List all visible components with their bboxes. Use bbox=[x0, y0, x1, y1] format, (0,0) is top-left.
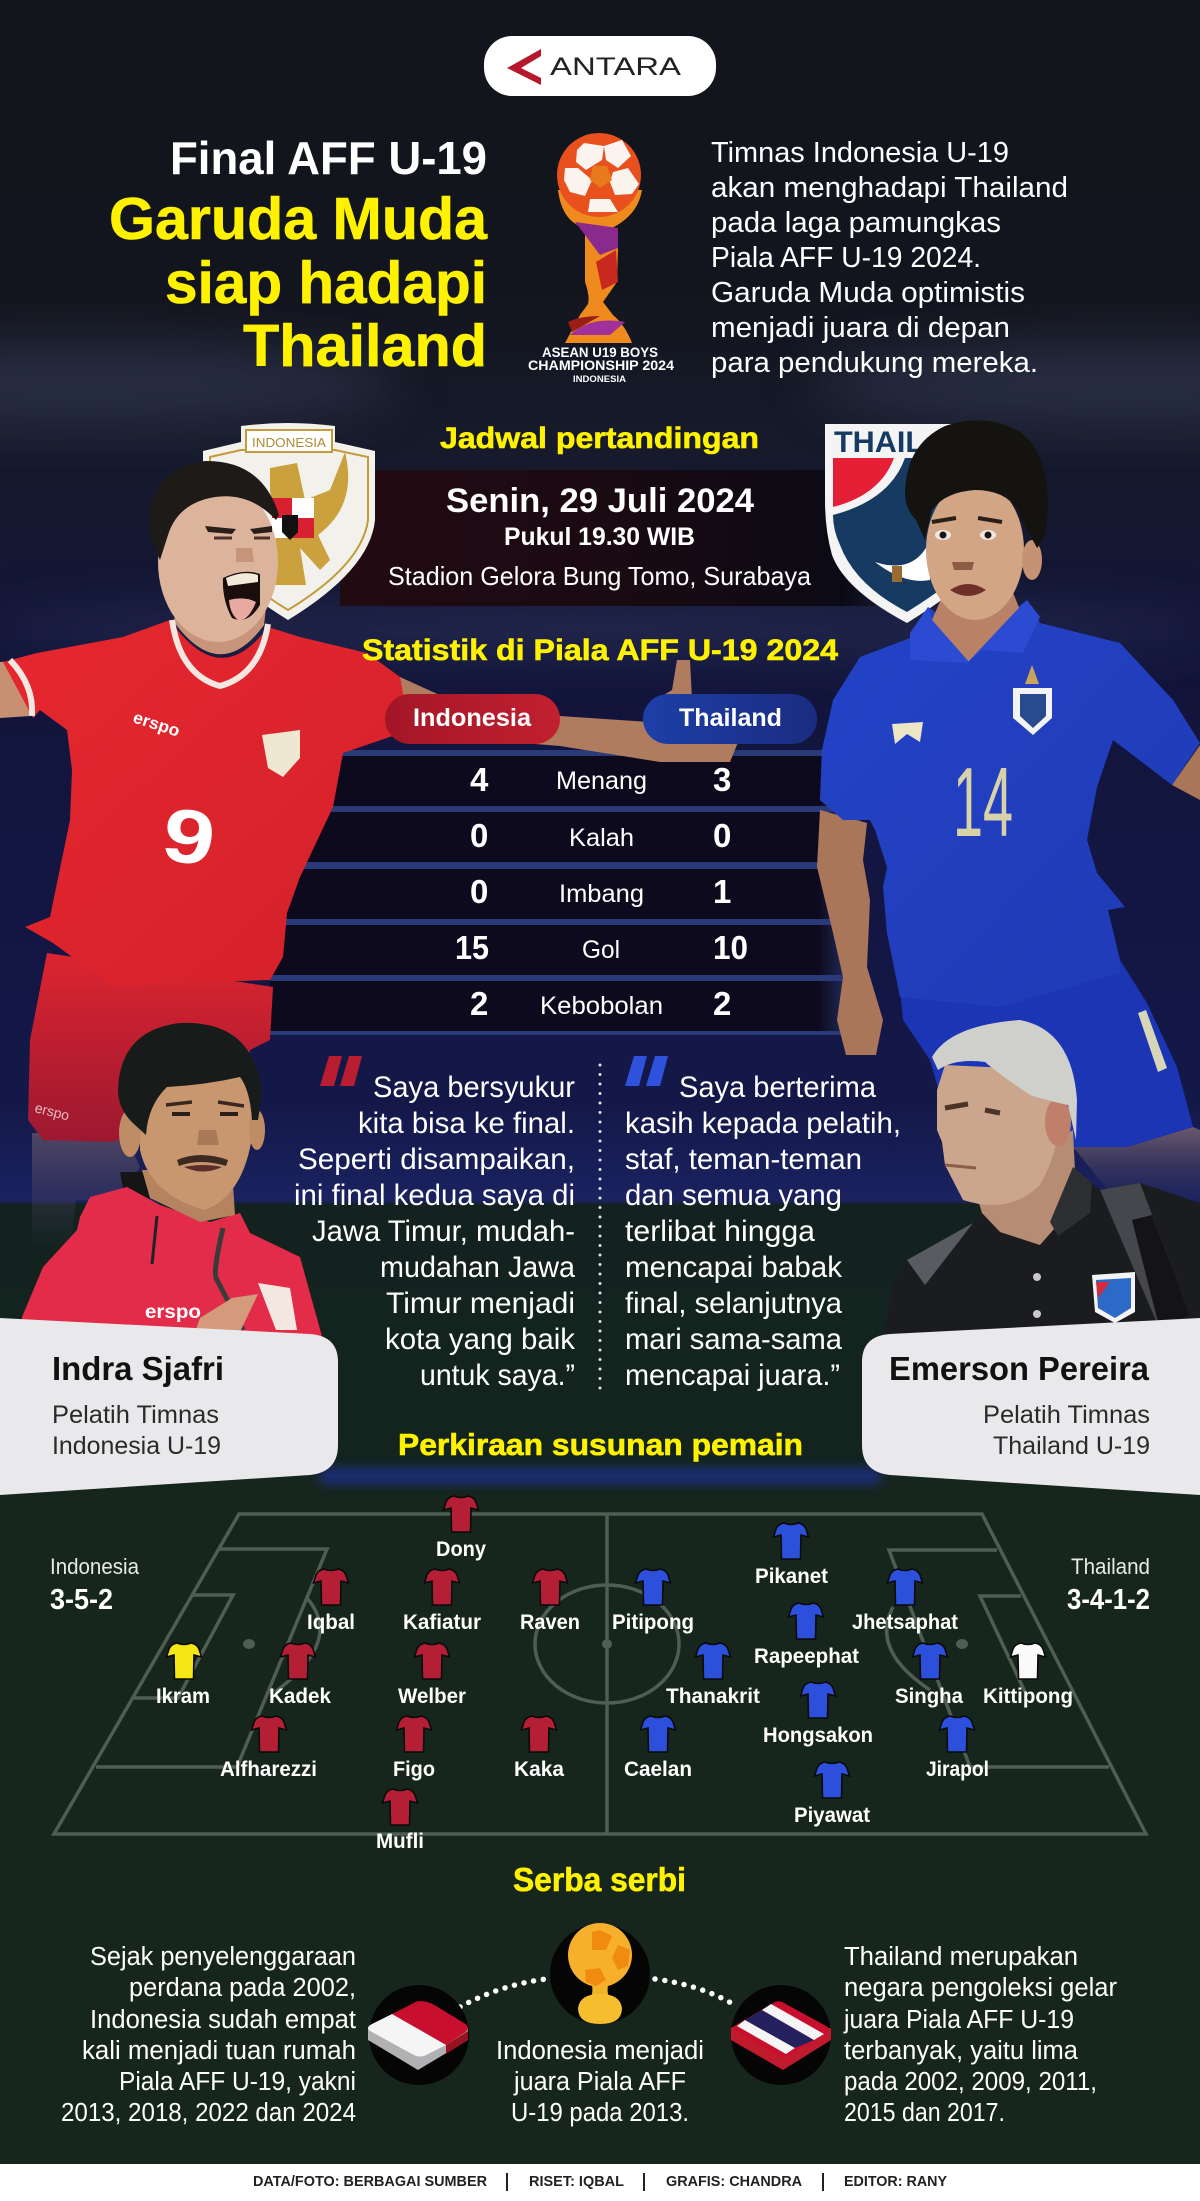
intro text: Timnas Indonesia U-19 bbox=[711, 137, 1009, 169]
title: Final AFF U-19 bbox=[170, 132, 487, 184]
collar bbox=[910, 600, 1040, 663]
team pills bbox=[385, 694, 560, 744]
player: Indonesia number 9: erspo bbox=[33, 1099, 71, 1123]
name card: Emerson Pereira: Emerson Pereira bbox=[889, 1350, 1150, 1387]
inner collar bbox=[120, 1172, 150, 1200]
player: Kittipong: Kittipong bbox=[983, 1685, 1073, 1708]
logo: ANTARA: ANTARA bbox=[550, 53, 681, 81]
row: Menang: 3 bbox=[713, 761, 731, 798]
schedule details: Stadion Gelora Bung Tomo, Surabaya bbox=[388, 561, 812, 591]
shorts bbox=[900, 960, 1193, 1147]
crest bbox=[262, 730, 300, 777]
row: Kebobolan: Kebobolan bbox=[540, 992, 663, 1020]
bag strap bbox=[1100, 1183, 1190, 1330]
name card: Indra Sjafri: Indonesia U-19 bbox=[52, 1432, 221, 1460]
player: Figo: Figo bbox=[393, 1758, 435, 1781]
quote: Emerson Pereira: staf, teman-teman bbox=[625, 1143, 862, 1176]
legs bbox=[1073, 1127, 1200, 1205]
footer credits: GRAFIS: CHANDRA bbox=[666, 2173, 802, 2190]
icon: garuda bbox=[270, 452, 348, 585]
neck bbox=[142, 1170, 235, 1222]
mouth bbox=[223, 572, 260, 620]
trophy logo bbox=[528, 133, 675, 385]
neck bbox=[975, 1130, 1090, 1245]
player: Dony bbox=[436, 1496, 486, 1561]
footer credits: RISET: IQBAL bbox=[529, 2173, 624, 2190]
player: Pitipong: Pitipong bbox=[612, 1611, 694, 1634]
head bbox=[926, 480, 1024, 620]
player: Jhetsaphat bbox=[852, 1569, 958, 1634]
player: Pitipong bbox=[612, 1569, 694, 1634]
quote: Emerson Pereira: mari sama-sama bbox=[625, 1323, 843, 1356]
trivia text: 2013 champion bbox=[496, 2037, 704, 2127]
quote: Indra Sjafri: Timur menjadi bbox=[386, 1287, 575, 1320]
row: Gol: 10 bbox=[713, 929, 748, 966]
player: Caelan bbox=[624, 1716, 692, 1781]
coach photo: Indra Sjafri: erspo bbox=[145, 1302, 201, 1323]
quote: Emerson Pereira: kasih kepada pelatih, bbox=[625, 1107, 901, 1140]
player: Figo bbox=[393, 1716, 435, 1781]
team label: Indonesia 3-5-2: 3-5-2 bbox=[50, 1584, 113, 1616]
trivia text: Thailand titles: juara Piala AFF U-19 bbox=[843, 2006, 1074, 2034]
player: Indonesia number 9: erspo bbox=[131, 708, 182, 741]
statistics heading: Statistik di Piala AFF U-19 2024 bbox=[362, 634, 838, 667]
name card: Indra Sjafri bbox=[0, 1318, 338, 1495]
trophy logo: INDONESIA bbox=[573, 374, 626, 385]
statistics table: Thailand bbox=[679, 704, 782, 732]
row: Kalah: Kalah bbox=[569, 824, 634, 852]
player: Dony: Dony bbox=[436, 1538, 486, 1561]
row: Kebobolan: 2 bbox=[713, 985, 731, 1022]
trivia text: Thailand titles: pada 2002, 2009, 2011, bbox=[844, 2068, 1097, 2096]
row: Kebobolan bbox=[470, 985, 731, 1022]
player: Raven bbox=[520, 1569, 580, 1634]
hair bbox=[905, 420, 1048, 548]
title: Garuda Muda bbox=[109, 186, 488, 252]
crest bbox=[1092, 1272, 1135, 1323]
quote: Emerson Pereira: dan semua yang bbox=[625, 1179, 842, 1212]
schedule details: Senin, 29 Juli 2024 bbox=[446, 482, 754, 520]
intro text: pada laga pamungkas bbox=[711, 207, 1001, 239]
name card: Indra Sjafri: Indra Sjafri bbox=[52, 1350, 224, 1387]
intro text: Piala AFF U-19 2024. bbox=[711, 242, 981, 274]
legs bbox=[32, 1100, 140, 1250]
trivia text: Indonesia hosts: kali menjadi tuan rumah bbox=[82, 2037, 356, 2065]
trivia text: Indonesia hosts: Piala AFF U-19, yakni bbox=[119, 2068, 356, 2096]
intro text: Garuda Muda optimistis bbox=[711, 277, 1025, 309]
trivia text: Indonesia hosts: Indonesia sudah empat bbox=[90, 2006, 356, 2034]
icon: blue quote mark bbox=[625, 1056, 668, 1086]
hair bbox=[150, 461, 279, 560]
arms bbox=[817, 810, 883, 1055]
trophy logo: CHAMPIONSHIP 2024 bbox=[528, 358, 675, 373]
crest bbox=[1013, 688, 1052, 735]
team label: Thailand 3-4-1-2: 3-4-1-2 bbox=[1067, 1584, 1150, 1616]
player: Rapeephat bbox=[754, 1603, 859, 1668]
row: Imbang: 1 bbox=[713, 873, 731, 910]
neck bbox=[174, 590, 268, 654]
shorts bbox=[28, 953, 273, 1142]
schedule panel background bbox=[340, 470, 900, 606]
quote: Indra Sjafri: Seperti disampaikan, bbox=[298, 1143, 575, 1176]
quote: Indra Sjafri: untuk saya.” bbox=[420, 1359, 575, 1392]
player: Iqbal: Iqbal bbox=[307, 1611, 355, 1634]
player: Mufli: Mufli bbox=[376, 1830, 424, 1853]
coach photo: Indra Sjafri bbox=[22, 1023, 323, 1340]
team label: Thailand 3-4-1-2 bbox=[1067, 1554, 1150, 1616]
trivia text: Indonesia hosts: 2013, 2018, 2022 dan 2024 bbox=[61, 2099, 356, 2127]
football pitch bbox=[54, 1514, 1146, 1834]
team label: Indonesia 3-5-2 bbox=[50, 1554, 140, 1616]
jersey bbox=[3, 620, 410, 987]
row: Menang: Menang bbox=[556, 767, 647, 795]
icon: Thailand flag bbox=[731, 1985, 831, 2085]
player: Hongsakon: Hongsakon bbox=[763, 1724, 873, 1747]
trophy logo: ASEAN U19 BOYS bbox=[542, 345, 658, 360]
Thailand crest bbox=[825, 424, 990, 623]
name card: Emerson Pereira: Thailand U-19 bbox=[993, 1432, 1150, 1460]
row: Menang bbox=[470, 761, 731, 798]
quote: Emerson Pereira: final, selanjutnya bbox=[625, 1287, 843, 1320]
player: Kadek: Kadek bbox=[269, 1685, 331, 1708]
footer credits: DATA/FOTO: BERBAGAI SUMBER bbox=[253, 2173, 487, 2190]
row: Menang: 4 bbox=[470, 761, 489, 798]
logo: ANTARA bbox=[484, 36, 716, 96]
trivia text: Indonesia hosts bbox=[61, 1943, 356, 2127]
player: Indonesia number 9 bbox=[0, 461, 745, 1250]
statistics table: Indonesia bbox=[413, 704, 532, 732]
player: Iqbal bbox=[307, 1569, 355, 1634]
zipper and drawstring bbox=[215, 1228, 243, 1330]
player: Jhetsaphat: Jhetsaphat bbox=[852, 1611, 958, 1634]
jersey bbox=[820, 600, 1200, 1007]
icon: Indonesia flag bbox=[368, 1985, 469, 2085]
intro text bbox=[711, 137, 1068, 379]
player: Piyawat bbox=[794, 1762, 870, 1827]
hand bbox=[195, 1294, 258, 1332]
footer credits: EDITOR: RANY bbox=[844, 2173, 947, 2190]
name card: Emerson Pereira: Pelatih Timnas bbox=[983, 1401, 1150, 1429]
player: Thanakrit: Thanakrit bbox=[666, 1685, 760, 1708]
name card: Emerson Pereira bbox=[862, 1318, 1200, 1495]
row: Imbang: Imbang bbox=[559, 880, 644, 908]
schedule details bbox=[388, 482, 812, 591]
player: Welber: Welber bbox=[398, 1685, 466, 1708]
footer credits bbox=[0, 2164, 1200, 2201]
player: Singha bbox=[895, 1643, 963, 1708]
icon: championship trophy bbox=[550, 1923, 650, 2024]
player: Raven: Raven bbox=[520, 1611, 580, 1634]
trivia text: Indonesia hosts: Sejak penyelenggaraan bbox=[90, 1943, 356, 1971]
coach photo: Emerson Pereira bbox=[883, 1020, 1200, 1345]
quote: Emerson Pereira bbox=[625, 1056, 901, 1392]
Indonesia players bbox=[156, 1496, 580, 1853]
face bbox=[937, 1065, 1062, 1205]
trivia text: Thailand titles: Thailand merupakan bbox=[844, 1943, 1078, 1971]
player: Jirapol bbox=[926, 1716, 989, 1781]
trivia heading: Serba serbi bbox=[513, 1861, 686, 1898]
arm bbox=[0, 660, 30, 718]
icon: red quote mark bbox=[320, 1056, 362, 1086]
quote: Emerson Pereira: mencapai babak bbox=[625, 1251, 842, 1284]
Indonesia crest bbox=[203, 423, 375, 620]
player: Thailand number 14: 14 bbox=[953, 747, 1013, 857]
player: Thanakrit bbox=[666, 1643, 760, 1708]
lineup heading: Perkiraan susunan pemain bbox=[398, 1427, 803, 1462]
quote: Indra Sjafri: kota yang baik bbox=[385, 1323, 575, 1356]
player: Kadek bbox=[269, 1643, 331, 1708]
trivia text: Thailand titles: terbanyak, yaitu lima bbox=[844, 2037, 1079, 2065]
face bbox=[140, 1075, 253, 1210]
player: Pikanet: Pikanet bbox=[755, 1565, 828, 1588]
Thailand crest: THAIL bbox=[834, 426, 924, 459]
quote: Emerson Pereira: Saya berterima bbox=[679, 1071, 877, 1104]
player: Alfharezzi: Alfharezzi bbox=[220, 1758, 317, 1781]
row: Kalah: 0 bbox=[470, 817, 488, 854]
player: Alfharezzi bbox=[220, 1716, 317, 1781]
garuda bbox=[258, 1283, 297, 1330]
player: Rapeephat: Rapeephat bbox=[754, 1645, 859, 1668]
quote: Indra Sjafri: Saya bersyukur bbox=[373, 1071, 575, 1104]
row: Kalah: 0 bbox=[713, 817, 731, 854]
intro text: akan menghadapi Thailand bbox=[711, 172, 1068, 204]
statistics row backgrounds bbox=[270, 756, 860, 1031]
hair bbox=[932, 1020, 1077, 1140]
player: Hongsakon bbox=[763, 1682, 873, 1747]
hair bbox=[118, 1023, 262, 1135]
player: Indonesia number 9: 9 bbox=[157, 792, 220, 883]
player: Ikram: Ikram bbox=[156, 1685, 210, 1708]
row: Imbang: 0 bbox=[470, 873, 488, 910]
trivia text: Thailand titles: negara pengoleksi gelar bbox=[844, 1974, 1118, 2002]
schedule heading: Jadwal pertandingan bbox=[440, 422, 759, 455]
Indonesia crest: INDONESIA bbox=[252, 435, 326, 450]
team label: Thailand 3-4-1-2: Thailand bbox=[1071, 1554, 1150, 1579]
row: Gol: Gol bbox=[582, 936, 620, 964]
player: Kittipong bbox=[983, 1643, 1073, 1708]
quote: Indra Sjafri bbox=[294, 1056, 576, 1392]
player: Welber bbox=[398, 1643, 466, 1708]
trivia text: 2013 champion: juara Piala AFF bbox=[513, 2068, 686, 2096]
title: Thailand bbox=[243, 313, 487, 379]
quote: Indra Sjafri: ini final kedua saya di bbox=[294, 1179, 575, 1212]
trivia text: Thailand titles bbox=[843, 1943, 1118, 2127]
shoulder shine bbox=[907, 1223, 973, 1285]
title: siap hadapi bbox=[165, 250, 487, 316]
row: Gol bbox=[455, 929, 748, 966]
row: Kalah bbox=[470, 817, 731, 854]
player: Thailand number 14 bbox=[817, 420, 1200, 1205]
player: Mufli bbox=[376, 1789, 424, 1853]
Thailand players bbox=[612, 1523, 1073, 1827]
player: Kaka: Kaka bbox=[514, 1758, 564, 1781]
intro text: menjadi juara di depan bbox=[711, 312, 1010, 344]
neck bbox=[932, 590, 1020, 662]
player: Kaka bbox=[514, 1716, 564, 1781]
row: Gol: 15 bbox=[455, 929, 489, 966]
row: Imbang bbox=[470, 873, 731, 910]
row: Kebobolan: 2 bbox=[470, 985, 488, 1022]
trivia text: Indonesia hosts: perdana pada 2002, bbox=[129, 1974, 356, 2002]
trivia text: 2013 champion: Indonesia menjadi bbox=[496, 2037, 704, 2065]
quote: Indra Sjafri: mudahan Jawa bbox=[380, 1251, 576, 1284]
trivia text: Thailand titles: 2015 dan 2017. bbox=[844, 2099, 1005, 2127]
quote: Indra Sjafri: kita bisa ke final. bbox=[358, 1107, 575, 1140]
quote: Emerson Pereira: terlibat hingga bbox=[625, 1215, 816, 1248]
player: Kafiatur bbox=[403, 1569, 481, 1634]
trivia text: 2013 champion: U-19 pada 2013. bbox=[511, 2099, 689, 2127]
schedule details: Pukul 19.30 WIB bbox=[504, 523, 695, 551]
intro text: para pendukung mereka. bbox=[711, 347, 1038, 379]
player: Piyawat: Piyawat bbox=[794, 1804, 870, 1827]
statistics table bbox=[385, 694, 817, 1022]
name card: Indra Sjafri: Pelatih Timnas bbox=[52, 1401, 219, 1429]
player: Jirapol: Jirapol bbox=[926, 1758, 989, 1781]
player: Singha: Singha bbox=[895, 1685, 963, 1708]
player: Caelan: Caelan bbox=[624, 1758, 692, 1781]
hoodie bbox=[22, 1187, 323, 1340]
player: Kafiatur: Kafiatur bbox=[403, 1611, 481, 1634]
quote: Emerson Pereira: mencapai juara.” bbox=[625, 1359, 840, 1392]
quote: Indra Sjafri: Jawa Timur, mudah- bbox=[312, 1215, 575, 1248]
icon: Antara mark bbox=[507, 49, 541, 85]
player: Pikanet bbox=[755, 1523, 828, 1588]
dotted connectors bbox=[460, 1979, 733, 2007]
head bbox=[158, 482, 278, 642]
title bbox=[109, 132, 488, 379]
team label: Indonesia 3-5-2: Indonesia bbox=[50, 1554, 140, 1579]
player: Ikram bbox=[156, 1643, 210, 1708]
polo shirt bbox=[883, 1167, 1200, 1345]
